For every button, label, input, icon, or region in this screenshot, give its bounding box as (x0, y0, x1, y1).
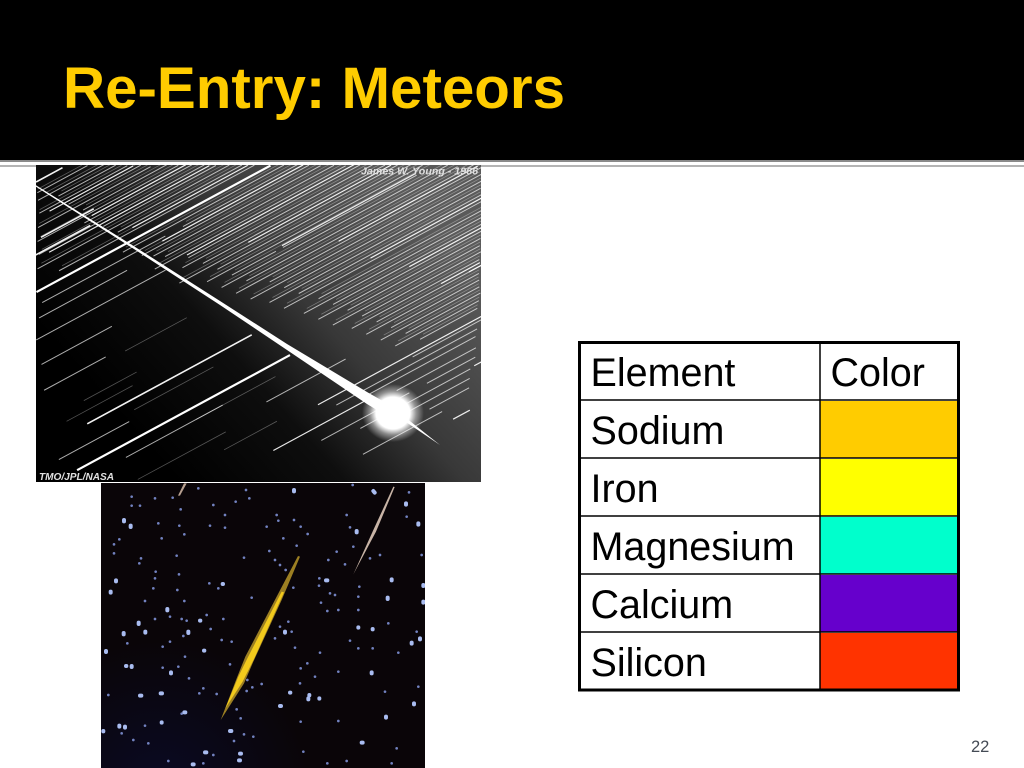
color swatch: iron (820, 459, 958, 516)
table grid (580, 343, 958, 690)
yellow meteor (221, 556, 300, 720)
header band (0, 0, 1024, 167)
table text: Element (590, 351, 735, 395)
meteor fireball (362, 384, 424, 442)
faint stars (108, 485, 422, 763)
table text: Magnesium (590, 525, 795, 569)
table: element colors (580, 342, 958, 690)
photo: meteors in starry sky (101, 483, 425, 768)
table text: Calcium (590, 583, 733, 627)
table border (580, 342, 958, 690)
meteor trail (36, 185, 395, 421)
color swatch: sodium (820, 401, 958, 458)
bright stars (103, 490, 423, 764)
table text: Color (830, 351, 925, 395)
photo credit bottom: TMO/JPL/NASA (39, 471, 114, 483)
table text (590, 351, 925, 685)
table text: Iron (590, 467, 659, 511)
color swatch: calcium (820, 575, 958, 632)
title: Re-Entry: Meteors (63, 56, 565, 121)
page number: 22 (971, 738, 989, 756)
color swatch: magnesium (820, 517, 958, 574)
color swatch: silicon (820, 633, 958, 690)
table text: Sodium (590, 409, 724, 453)
pale meteor upper right (353, 487, 395, 574)
pale meteor fragment top (178, 483, 187, 496)
table text: Silicon (590, 641, 707, 685)
photo credit top: James W. Young - 1966 (361, 166, 478, 178)
photo: long-exposure meteor streak (36, 165, 481, 482)
